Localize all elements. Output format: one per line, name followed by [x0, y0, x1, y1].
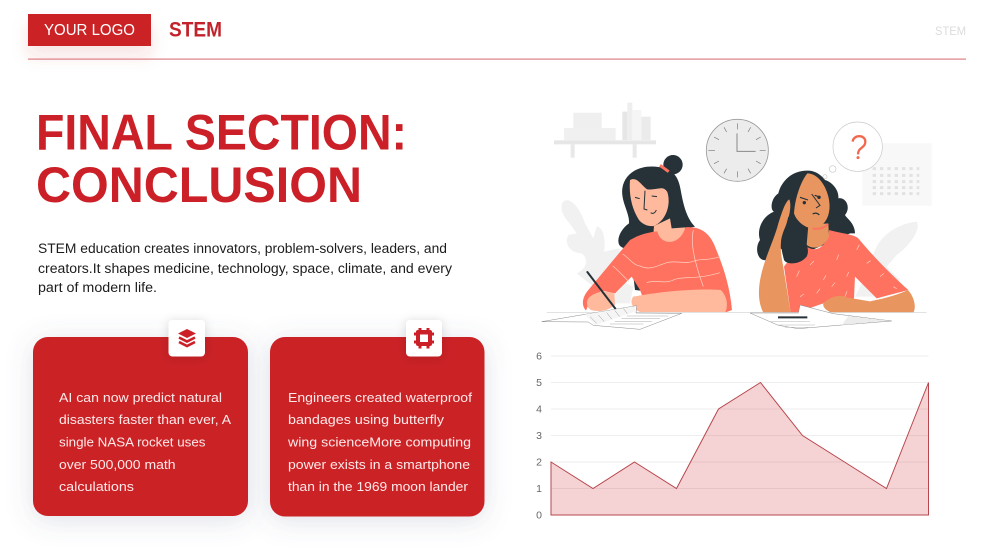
intro paragraph: creators.It shapes medicine, technology, space, climate, and every	[38, 261, 452, 276]
card two text: wing scienceMore computing	[287, 434, 471, 450]
card two text: Engineers created waterproof	[288, 390, 472, 405]
icon: wall clock	[706, 119, 768, 181]
face and neck	[807, 223, 829, 248]
sweater	[784, 230, 908, 313]
raised arm	[759, 199, 791, 313]
header	[28, 14, 966, 60]
card one text: AI can now predict natural	[59, 390, 222, 405]
brand name: STEM	[169, 18, 222, 42]
desk edge	[547, 311, 927, 313]
card one text: single NASA rocket uses	[59, 434, 206, 450]
hands and forearm	[587, 292, 615, 311]
card two text	[287, 390, 472, 494]
icon: right notebook and pen	[750, 305, 892, 329]
card one text: calculations	[59, 479, 135, 494]
pen	[587, 272, 615, 309]
woman two	[757, 171, 915, 313]
sweater and arm	[583, 227, 732, 312]
title: FINAL SECTION:	[36, 104, 407, 160]
card one text: over 500,000 math	[59, 457, 176, 472]
icon: background plants	[562, 200, 918, 303]
icon: left notebook	[542, 306, 682, 329]
back hair	[757, 171, 855, 260]
logo badge: YOUR LOGO	[44, 22, 135, 39]
logo badge	[28, 14, 151, 46]
resting forearm	[823, 290, 915, 313]
chart axis labels: 5	[536, 377, 542, 389]
panel: AI fact card	[33, 320, 248, 516]
icon: layers	[168, 320, 205, 356]
chart axis labels: 4	[536, 404, 542, 416]
hair	[618, 155, 695, 291]
panel: engineering fact card	[270, 320, 484, 516]
card one text: disasters faster than ever, A	[59, 412, 231, 427]
chart area series	[551, 382, 928, 515]
icon: calendar	[862, 143, 932, 206]
title: CONCLUSION	[36, 157, 362, 213]
icon: chip	[406, 320, 442, 356]
chart axis labels: 3	[536, 430, 542, 442]
woman one	[583, 155, 732, 312]
area chart	[536, 350, 928, 522]
chart axis labels: 0	[536, 510, 542, 522]
card two text: power exists in a smartphone	[288, 457, 470, 472]
icon: wall shelf	[554, 103, 656, 158]
intro paragraph: STEM education creates innovators, problem-solvers, leaders, and	[38, 241, 447, 256]
intro paragraph: part of modern life.	[38, 280, 157, 295]
title	[36, 104, 407, 213]
header right label: STEM	[935, 24, 966, 38]
chart grid lines	[551, 356, 928, 488]
icon: question bubble	[823, 122, 882, 179]
card two text: bandages using butterfly	[288, 412, 445, 427]
chart axis labels: 1	[536, 483, 542, 495]
intro paragraph	[38, 241, 452, 295]
face	[630, 179, 669, 226]
chart axis labels: 6	[536, 350, 542, 362]
chart axis labels: 2	[536, 456, 542, 468]
card one text	[59, 390, 231, 494]
card two text: than in the 1969 moon lander	[288, 479, 469, 494]
front hair lock	[781, 217, 808, 263]
illustration: two students at a desk	[542, 103, 932, 329]
chart axis labels	[536, 350, 542, 522]
